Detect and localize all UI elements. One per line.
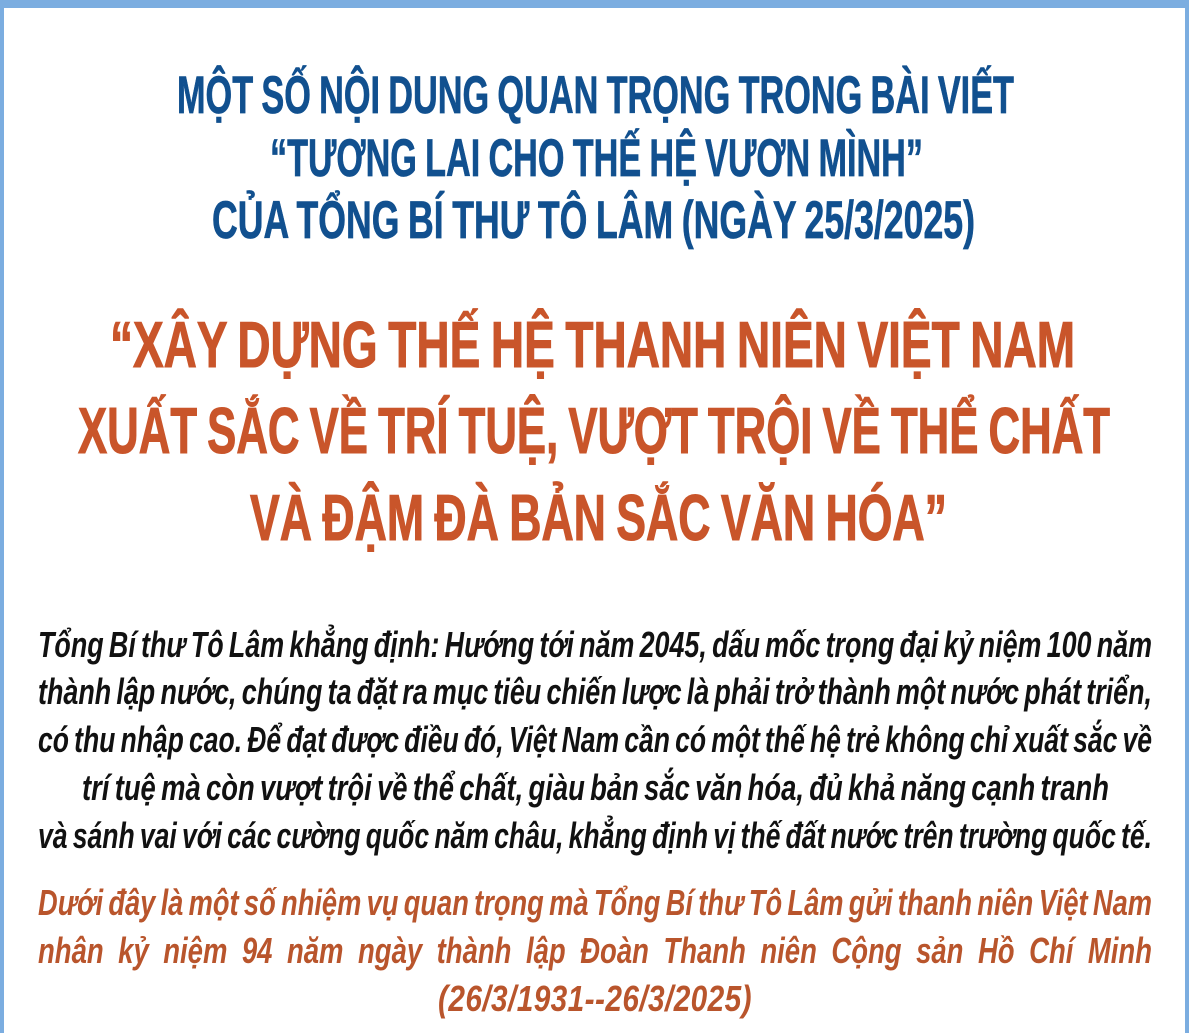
closing note: (26/3/1931--26/3/2025): [438, 978, 752, 1019]
closing note: [38, 882, 1152, 1019]
title: [177, 64, 1014, 250]
body paragraph: [38, 624, 1152, 856]
headline quote: [78, 308, 1110, 554]
